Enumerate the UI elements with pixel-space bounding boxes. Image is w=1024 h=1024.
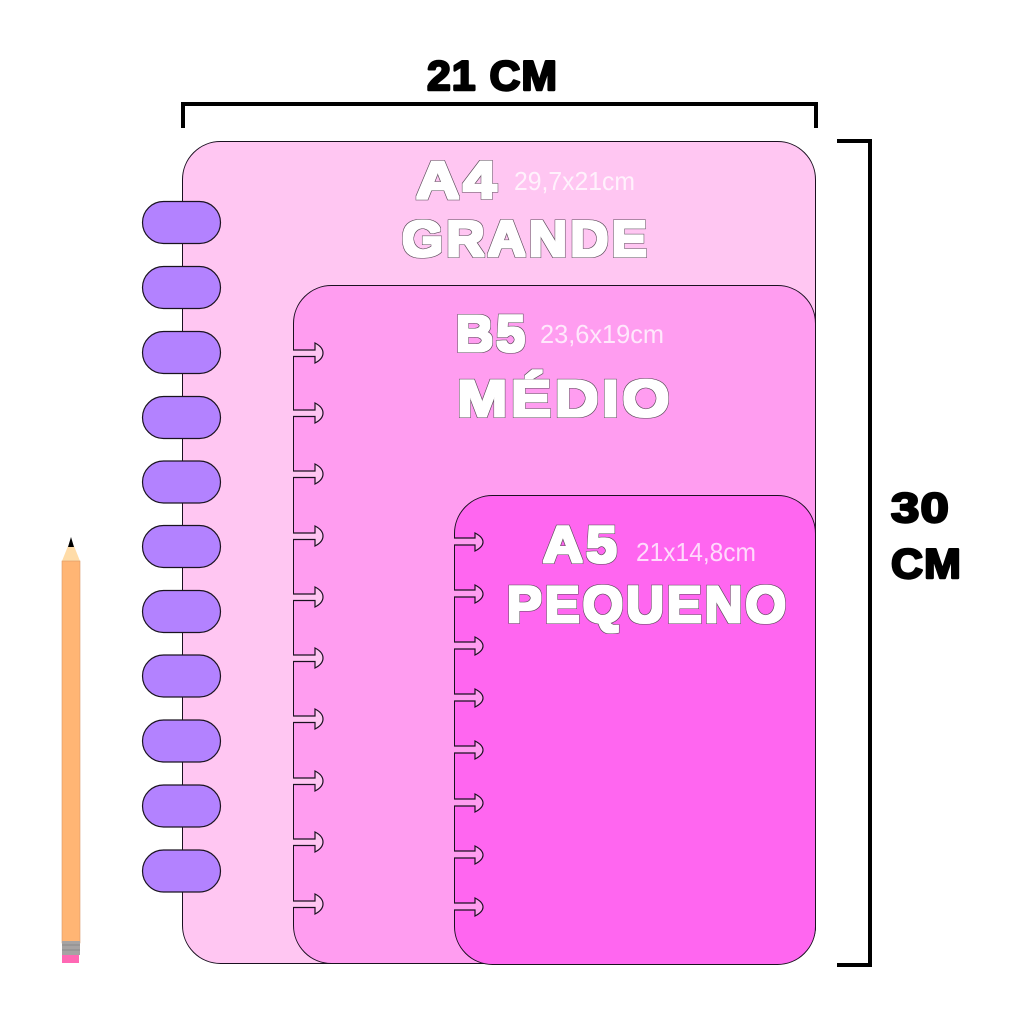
- height bracket: [837, 141, 870, 965]
- panel: B5 notebook: [293, 286, 816, 964]
- width bracket: [183, 104, 816, 128]
- purple disc rings: [142, 202, 220, 892]
- height dimension label: [891, 484, 962, 587]
- panel: A4 notebook: [182, 142, 816, 964]
- B5 heading: B5: [456, 305, 528, 362]
- height dimension label: CM: [891, 540, 962, 587]
- A4 dimensions: 29,7x21cm: [514, 166, 635, 196]
- width dimension label: 21 CM: [427, 52, 558, 99]
- A4 heading: A4: [416, 152, 500, 210]
- panel: A5 notebook: [454, 496, 816, 964]
- icon: pencil: [62, 537, 80, 963]
- PEQUENO label: PEQUENO: [507, 576, 789, 633]
- B5 punched hooks: [293, 343, 323, 914]
- MÉDIO label: MÉDIO: [457, 370, 673, 427]
- A5 dimensions: 21x14,8cm: [636, 537, 756, 567]
- B5 dimensions: 23,6x19cm: [540, 319, 664, 349]
- GRANDE label: GRANDE: [402, 211, 650, 267]
- A5 punched hooks: [454, 533, 483, 916]
- A5 heading: A5: [543, 516, 620, 573]
- height dimension label: 30: [891, 484, 950, 531]
